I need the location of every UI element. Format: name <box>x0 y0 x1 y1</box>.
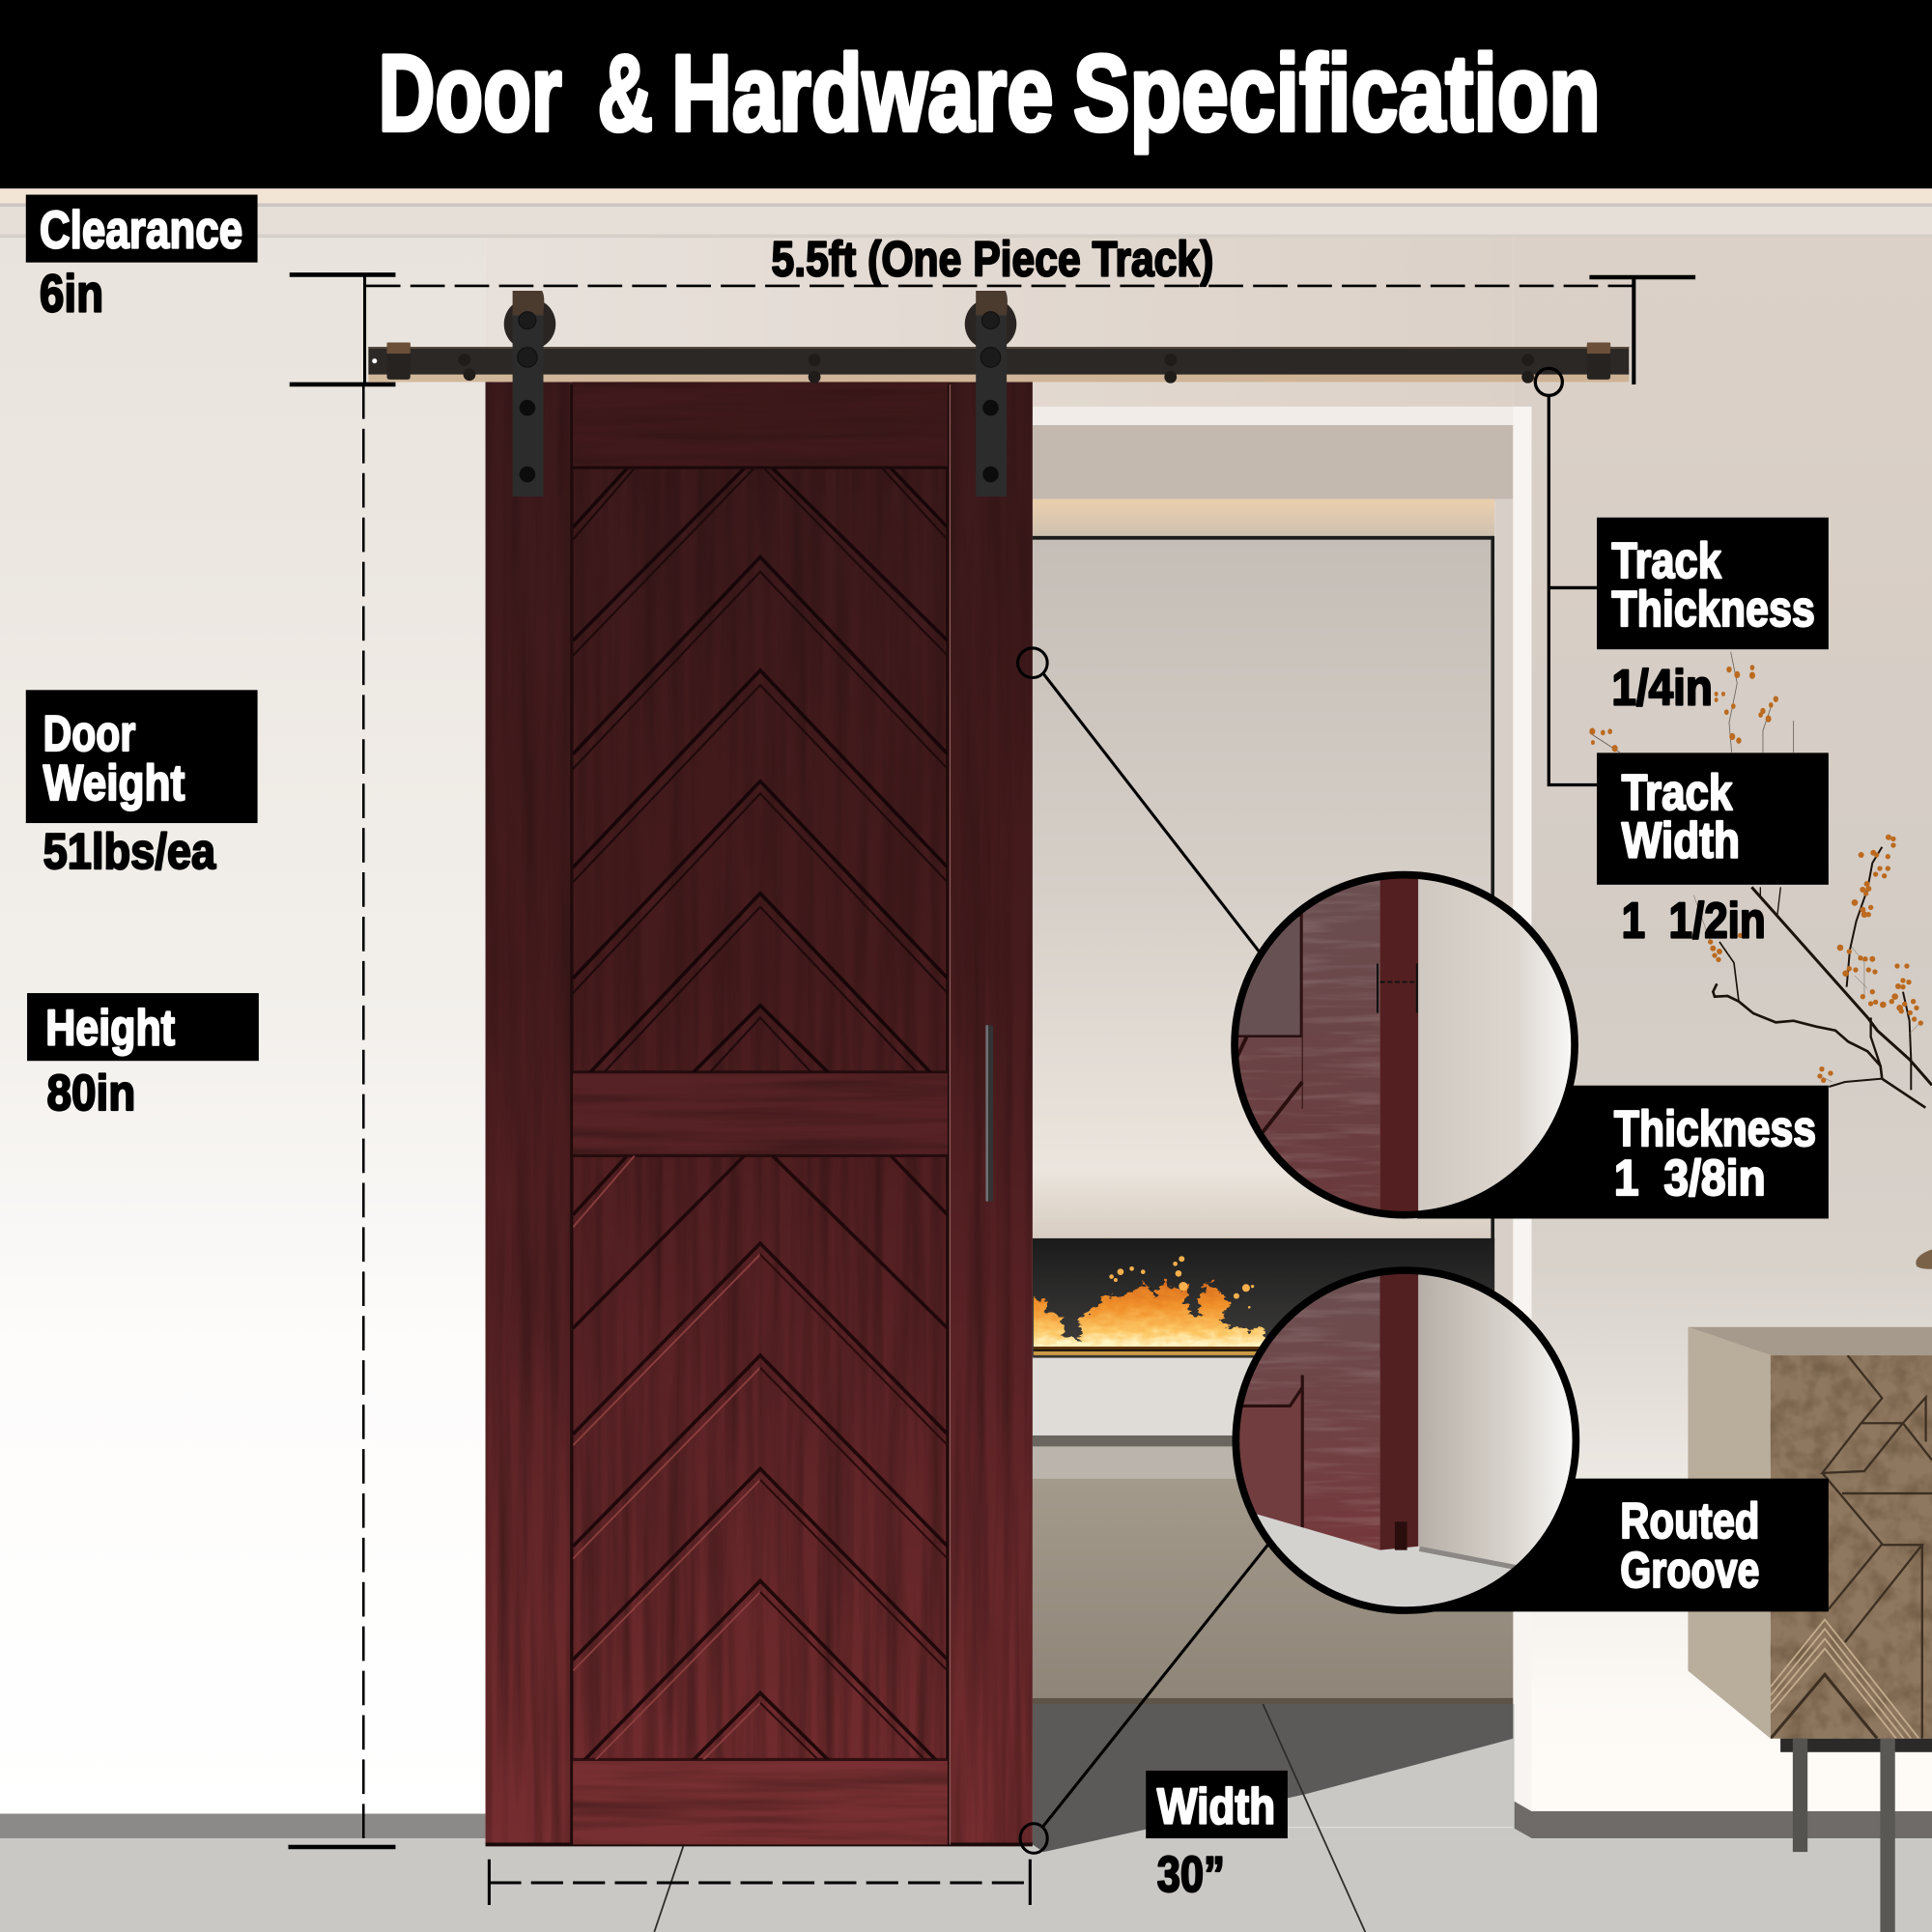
door middle rail <box>573 1072 948 1155</box>
label: track length: 5.5ft (One Piece Track) <box>771 232 1213 287</box>
label: height <box>27 993 259 1122</box>
upper chevron panel <box>573 469 948 1105</box>
vase <box>1916 1249 1932 1269</box>
door stile and panel seams <box>572 384 950 1844</box>
title <box>379 32 1601 154</box>
title: Hardware <box>671 32 1054 154</box>
label: thickness: 1 3/8in <box>1614 1151 1766 1207</box>
cabinet legs <box>1780 1739 1932 1932</box>
lower chevron panel <box>573 1155 948 1783</box>
title: Specification <box>1073 32 1601 154</box>
track stoppers <box>387 343 1610 380</box>
label: track width: Width <box>1622 813 1740 869</box>
label: clearance <box>26 195 258 324</box>
label: width <box>1146 1771 1288 1903</box>
label: height: Height <box>45 1001 175 1057</box>
label: door weight: Weight <box>43 755 185 811</box>
label: clearance: Clearance <box>40 199 242 259</box>
door handle <box>985 1025 993 1202</box>
label: track thickness: Thickness <box>1611 582 1815 638</box>
barn door <box>486 382 1033 1844</box>
routed groove label box <box>1417 1479 1829 1611</box>
cabinet <box>1688 1249 1932 1932</box>
label: routed groove: Routed <box>1620 1493 1759 1549</box>
dimension: track length line <box>366 277 1695 384</box>
label: track thickness <box>1597 518 1829 717</box>
label: routed groove: Groove <box>1620 1543 1759 1599</box>
label: door weight: 51lbs/ea <box>43 824 216 880</box>
sliding track rail <box>368 343 1629 384</box>
doorway opening <box>1033 407 1531 1811</box>
floor <box>0 1704 1932 1932</box>
door bottom rail <box>573 1759 948 1844</box>
label: width: 30” <box>1157 1847 1225 1903</box>
label: track thickness: 1/4in <box>1611 661 1713 717</box>
callout connector: track <box>1535 368 1597 784</box>
header bar <box>0 0 1932 188</box>
thickness label box <box>1417 1086 1829 1218</box>
decorative lower branch <box>1693 835 1932 1108</box>
zoom circle: door thickness <box>1233 868 1583 1220</box>
title: Door <box>379 32 562 154</box>
title: & <box>598 32 653 154</box>
fireplace flames <box>1027 1256 1268 1359</box>
callout connector: thickness <box>1018 648 1262 955</box>
label: routed groove <box>1620 1493 1759 1599</box>
decorative upper branch <box>1589 652 1794 753</box>
callout connector: groove and width <box>1020 1540 1271 1853</box>
label: thickness: Thickness <box>1614 1101 1816 1157</box>
label: track width: 1 1/2in <box>1622 894 1766 950</box>
label: track width: Track <box>1622 765 1733 821</box>
label: track thickness: Track <box>1611 533 1722 589</box>
left roller hanger <box>504 291 555 497</box>
track bolts <box>458 354 1534 384</box>
dimension: door width line <box>489 1860 1030 1905</box>
door top rail <box>573 382 948 468</box>
label: track width <box>1597 753 1829 950</box>
label: height: 80in <box>46 1065 135 1122</box>
zoom circle: routed groove <box>1233 1266 1583 1627</box>
label: width: Width <box>1157 1779 1275 1835</box>
dimension: height line <box>288 274 395 1847</box>
label: clearance: 6in <box>40 264 103 324</box>
right roller hanger <box>965 291 1016 497</box>
label: door weight: Door <box>43 706 135 762</box>
label: door weight <box>26 690 258 880</box>
label: thickness <box>1614 1101 1816 1207</box>
